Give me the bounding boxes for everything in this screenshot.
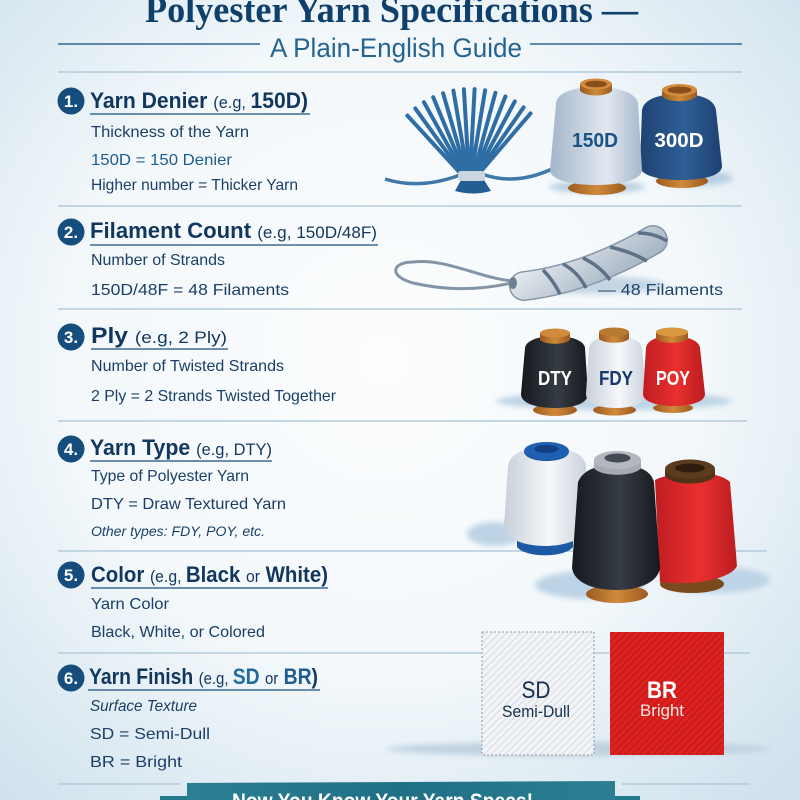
panel: yarn type text: DTY = Draw Textured Yarn bbox=[91, 496, 286, 513]
panel: yarn denier text: 1. bbox=[64, 92, 78, 111]
icon: large red spool bbox=[655, 460, 770, 593]
panel: filament count text bbox=[58, 218, 378, 299]
panel: yarn finish text: SD = Semi-Dull bbox=[90, 726, 210, 743]
panel: ply text: Ply (e.g, 2 Ply) bbox=[91, 323, 227, 348]
panel: yarn type text: Other types: FDY, POY, etc. bbox=[91, 523, 265, 539]
panel: yarn type text: Yarn Type (e.g, DTY) bbox=[90, 435, 272, 460]
panel: yarn denier text: 150D = 150 Denier bbox=[91, 152, 233, 169]
panel: yarn finish text bbox=[58, 664, 320, 771]
icon: BR swatch bbox=[610, 632, 724, 755]
panel: yarn type text: 4. bbox=[64, 440, 78, 459]
panel: color text bbox=[58, 562, 328, 641]
panel: yarn type text bbox=[58, 435, 286, 539]
icon: 150D spool bbox=[549, 78, 645, 195]
panel: filament count text: Number of Strands bbox=[91, 252, 225, 269]
panel: yarn finish text: Surface Texture bbox=[90, 698, 197, 715]
label: FDY: FDY bbox=[599, 368, 634, 390]
icon: large white spool bbox=[467, 442, 587, 555]
icon: yarn type spools row bbox=[496, 328, 732, 416]
icon: twisted filament rope bbox=[396, 233, 667, 294]
panel: filament count text: 150D/48F = 48 Filaments bbox=[91, 282, 289, 299]
icon: 150D spool: 150D bbox=[572, 130, 618, 152]
panel: yarn type text: Type of Polyester Yarn bbox=[91, 468, 249, 485]
icon: filament fan bbox=[385, 89, 552, 194]
icon: 300D spool: 300D bbox=[654, 130, 704, 152]
panel: color text: 5. bbox=[64, 566, 78, 585]
panel: color text: Color (e.g, Black or White) bbox=[91, 562, 328, 587]
icon: SD swatch bbox=[482, 632, 594, 755]
banner bbox=[160, 781, 640, 800]
panel: color text: Yarn Color bbox=[91, 596, 170, 613]
icon: SD swatch: Semi-Dull bbox=[502, 702, 570, 721]
panel: color text: Black, White, or Colored bbox=[91, 624, 265, 641]
label: POY: POY bbox=[656, 368, 691, 390]
panel: yarn finish text: BR = Bright bbox=[90, 754, 183, 771]
label: 48 filaments: — 48 Filaments bbox=[598, 282, 723, 299]
panel: filament count text: 2. bbox=[64, 223, 78, 242]
panel: filament count text: Filament Count (e.g, 150D/48F) bbox=[90, 218, 377, 243]
panel: ply text bbox=[58, 323, 337, 405]
panel: ply text: 2 Ply = 2 Strands Twisted Together bbox=[91, 388, 337, 405]
panel: yarn finish text: Yarn Finish (e.g, SD or BR) bbox=[89, 664, 318, 689]
panel: yarn denier text bbox=[58, 88, 310, 194]
icon: BR swatch: BR bbox=[647, 677, 677, 704]
panel: yarn denier text: Higher number = Thicker Yarn bbox=[91, 177, 298, 194]
subtitle: A Plain-English Guide bbox=[270, 33, 522, 63]
panel: yarn finish text: 6. bbox=[64, 669, 78, 688]
label: DTY: DTY bbox=[538, 368, 573, 390]
icon: large black spool bbox=[535, 451, 660, 603]
panel: ply text: Number of Twisted Strands bbox=[91, 358, 284, 375]
icon: 300D spool bbox=[640, 84, 733, 188]
panel: yarn denier text: Thickness of the Yarn bbox=[91, 124, 249, 141]
panel: yarn denier text: Yarn Denier (e.g, 150D) bbox=[90, 88, 308, 113]
icon: SD swatch: SD bbox=[522, 677, 550, 704]
icon: fabric swatch shadow bbox=[386, 742, 770, 756]
icon: BR swatch: Bright bbox=[640, 701, 684, 720]
panel: ply text: 3. bbox=[64, 328, 78, 347]
